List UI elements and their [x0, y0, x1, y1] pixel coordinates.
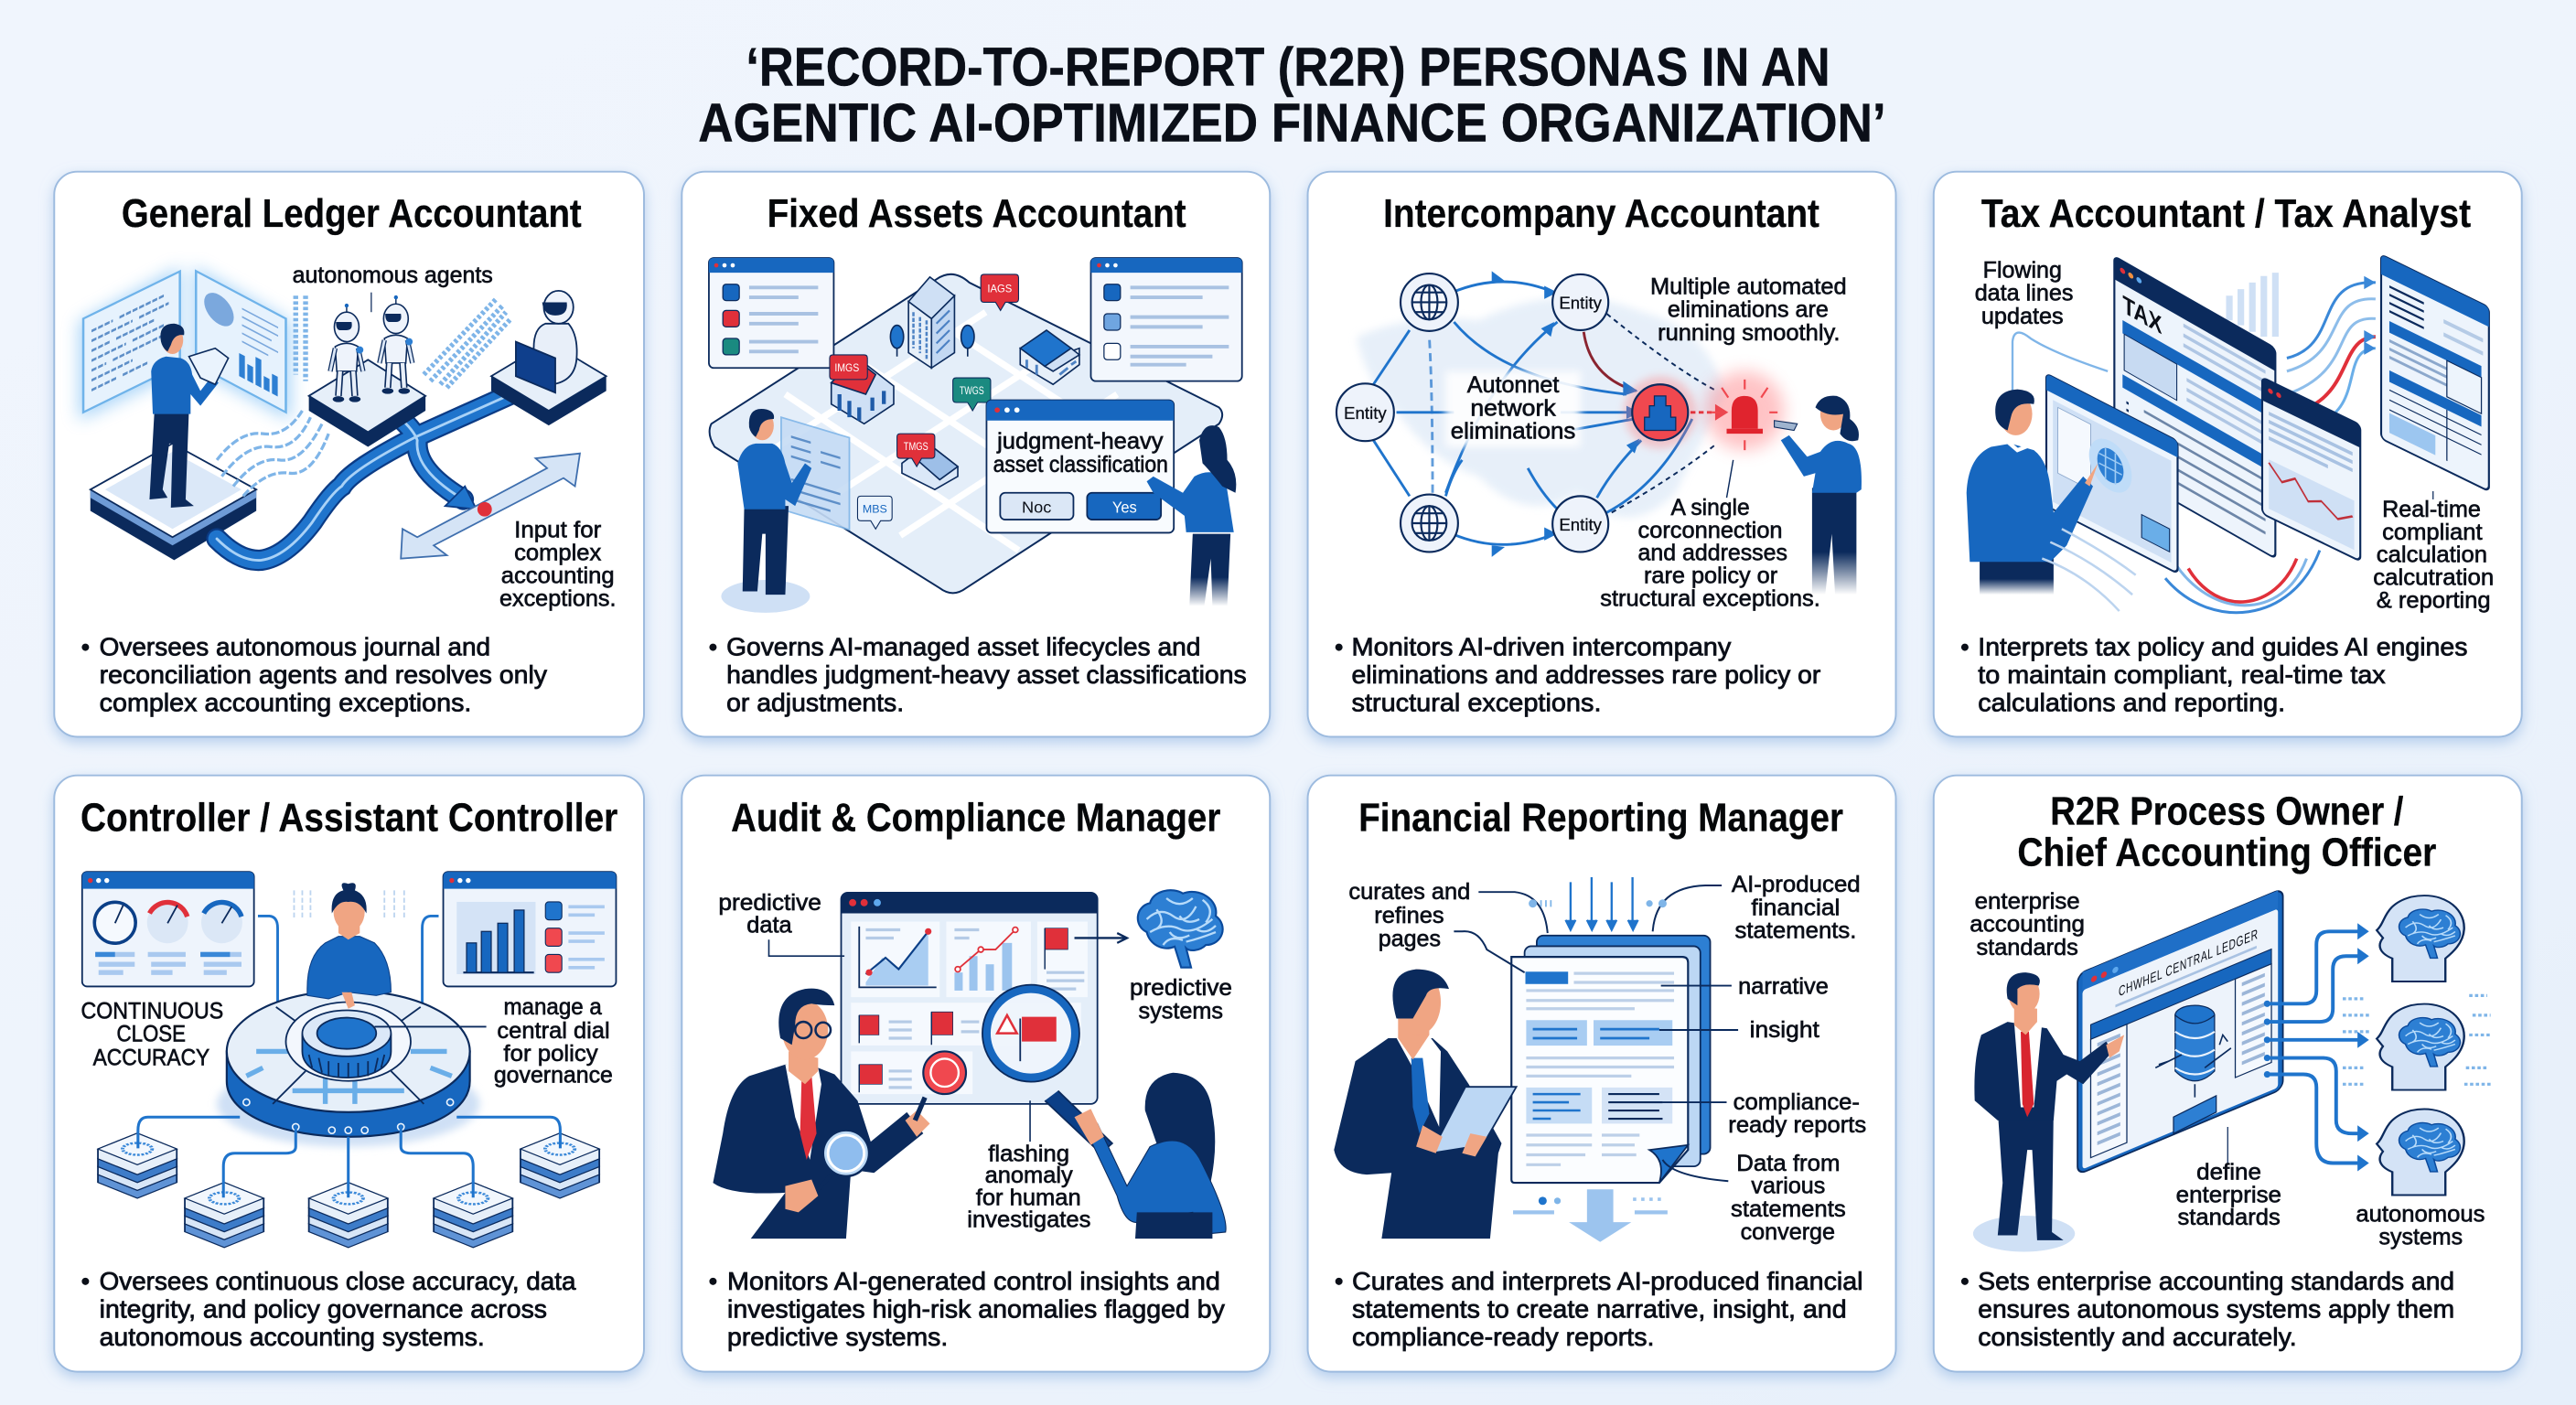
labels: [1970, 890, 2485, 1249]
flow path: [217, 394, 511, 561]
labels: structural exceptions.: [1600, 587, 1820, 612]
card background: [54, 172, 644, 736]
links to servers: [138, 1117, 560, 1197]
world map: [1357, 297, 1725, 518]
central ledger window: CHWHEL CENTRAL LEDGER: [2119, 927, 2259, 1000]
heading: [2017, 790, 2437, 874]
card background: [682, 172, 1270, 736]
labels: compliant: [2382, 520, 2483, 545]
labels: corconnection: [1638, 519, 1783, 543]
labels: Flowing: [1983, 259, 2062, 284]
data streams: [217, 295, 511, 496]
labels: Real-time: [2382, 498, 2481, 522]
labels: ready reports: [1728, 1113, 1866, 1138]
labels: Data from: [1736, 1152, 1840, 1176]
asset tags: IAGS: [987, 284, 1012, 295]
description: consistently and accurately.: [1978, 1323, 2297, 1351]
labels: predictive: [718, 891, 821, 916]
heading: General Ledger Accountant: [122, 192, 582, 236]
reporting manager: [1334, 970, 1517, 1239]
description: predictive systems.: [727, 1323, 948, 1351]
flowing lines from person: [2012, 333, 2108, 394]
description: Curates and interprets AI-produced financial: [1352, 1267, 1863, 1295]
central ledger window: [2077, 888, 2283, 1174]
heading: Intercompany Accountant: [1383, 192, 1819, 236]
decision dialog: asset classification: [993, 453, 1168, 477]
alarm: [1705, 371, 1784, 498]
heading: Financial Reporting Manager: [1358, 797, 1843, 841]
description: to maintain compliant, real-time tax: [1978, 660, 2386, 689]
description: [82, 633, 547, 717]
card background: [1934, 776, 2522, 1372]
large magnifier: [982, 985, 1112, 1153]
decision dialog: judgment-heavy: [996, 429, 1164, 454]
card background: [1934, 172, 2522, 736]
description: statements to create narrative, insight, and: [1352, 1294, 1847, 1323]
labels: pages: [1379, 927, 1441, 951]
page stack: [1511, 936, 1711, 1183]
arrows to brains: [2267, 931, 2366, 1164]
labels: eliminations are: [1668, 298, 1829, 323]
left asset window: [709, 258, 833, 368]
alert dashed links: [1606, 314, 1717, 512]
labels: compliance-: [1733, 1090, 1860, 1115]
labels: [718, 891, 1232, 1233]
description: [710, 633, 1247, 717]
asset tags: TMGS: [904, 441, 928, 453]
AI heads with brains: [2377, 896, 2464, 1195]
labels: accounting: [501, 564, 615, 589]
labels: define: [2196, 1160, 2261, 1185]
labels: accounting: [1970, 912, 2085, 937]
buildings: [832, 277, 1079, 489]
description: structural exceptions.: [1352, 689, 1601, 717]
description: ensures autonomous systems apply them: [1978, 1294, 2454, 1323]
arrow to brain: [1075, 933, 1127, 943]
output arrow: [1569, 1189, 1631, 1242]
labels: systems: [2378, 1225, 2463, 1249]
description: compliance-ready reports.: [1352, 1323, 1654, 1351]
labels: A single: [1670, 496, 1750, 520]
description: integrity, and policy governance across: [100, 1294, 547, 1323]
card background: [1308, 776, 1895, 1372]
leader line: [768, 939, 1030, 1142]
large tax window: [2114, 256, 2275, 559]
labels: calcutration: [2373, 565, 2494, 590]
woman with phone: [1775, 396, 1862, 595]
labels: Autonnet: [1467, 373, 1559, 398]
incoming arrows: [1566, 877, 1638, 929]
front window with AI brain: [2046, 373, 2177, 574]
labels: [1451, 274, 1847, 612]
asset tags: TWGS: [960, 385, 984, 397]
holographic screens: [79, 266, 291, 421]
heading: R2R Process Owner /: [2050, 790, 2403, 834]
description: [710, 1267, 1225, 1351]
panel: Tax Accountant / Tax Analyst: [1934, 172, 2522, 736]
network links: [1373, 282, 1692, 544]
labels: & reporting: [2377, 588, 2491, 613]
description: Sets enterprise accounting standards and: [1978, 1267, 2454, 1295]
globe nodes: [1401, 273, 1458, 552]
heading: Chief Accounting Officer: [2017, 831, 2437, 874]
description: eliminations and addresses rare policy or: [1352, 660, 1820, 689]
labels: updates: [1981, 305, 2064, 329]
investigator woman: [1075, 1073, 1226, 1239]
labels: investigates: [967, 1208, 1090, 1233]
label halo: [1445, 371, 1581, 446]
entity nodes: Entity: [1559, 294, 1603, 313]
description: autonomous accounting systems.: [100, 1323, 485, 1351]
card background: [682, 776, 1270, 1372]
labels: CONTINUOUS: [81, 999, 223, 1024]
third window with chart: [2262, 378, 2360, 561]
man pointing: [1967, 390, 2098, 595]
labels: manage a: [503, 995, 602, 1020]
labels: Multiple automated: [1650, 274, 1847, 299]
entity nodes: Entity: [1344, 403, 1387, 423]
labels: statements: [1731, 1197, 1846, 1222]
description: or adjustments.: [726, 689, 904, 717]
panel: Controller / Assistant Controller: [54, 776, 644, 1372]
labels: data lines: [1975, 282, 2073, 306]
description: [82, 1267, 576, 1351]
labels: enterprise: [1975, 890, 2080, 915]
labels: curates and: [1348, 880, 1470, 905]
brain icon: [1138, 890, 1223, 968]
labels: Input for: [514, 518, 601, 542]
labels: running smoothly.: [1658, 321, 1840, 346]
right tax window: [2381, 254, 2489, 491]
labels: [1348, 873, 1866, 1245]
description: [1336, 633, 1820, 717]
labels: narrative: [1738, 975, 1829, 1000]
isometric map: [710, 274, 1222, 593]
left platform: [91, 444, 256, 560]
labels: AI-produced: [1732, 873, 1861, 897]
controller woman: [307, 883, 391, 1009]
description: [1961, 633, 2467, 717]
description: investigates high-risk anomalies flagged by: [727, 1294, 1225, 1323]
description: Monitors AI-driven intercompany: [1352, 633, 1731, 661]
labels: CLOSE: [117, 1023, 186, 1047]
right asset window: [1090, 258, 1242, 381]
labels: for policy: [503, 1042, 598, 1067]
arrowheads: [1492, 271, 1639, 557]
red exception node: [1624, 376, 1728, 448]
labels: enterprise: [2176, 1183, 2281, 1207]
title: ‘RECORD-TO-REPORT (R2R) PERSONAS IN AN: [746, 36, 1830, 97]
labels: and addresses: [1638, 541, 1787, 565]
panel: Intercompany Accountant: [1308, 172, 1895, 736]
asset tags: MBS: [863, 503, 887, 515]
title: [698, 36, 1886, 153]
decision dialog: [986, 400, 1174, 532]
platforms with robots: [309, 291, 606, 446]
labels: insight: [1750, 1018, 1819, 1043]
process owner: [1973, 972, 2124, 1251]
bar chart window: [444, 872, 616, 986]
person: [149, 324, 229, 508]
description: Oversees continuous close accuracy, data: [100, 1267, 576, 1295]
central dial: [217, 991, 479, 1147]
description: Monitors AI-generated control insights and: [727, 1267, 1220, 1295]
labels: systems: [1139, 999, 1223, 1024]
labels: converge: [1741, 1220, 1835, 1245]
small data dots: [1513, 899, 1668, 1212]
large tax window: TAX: [2122, 291, 2163, 340]
labels: flashing: [988, 1142, 1069, 1166]
labels: central dial: [497, 1019, 610, 1044]
description: handles judgment-heavy asset classifications: [726, 660, 1247, 689]
description: calculations and reporting.: [1978, 689, 2285, 717]
double arrow: [401, 454, 580, 559]
entity nodes: [1336, 274, 1608, 552]
labels: autonomous agents: [293, 263, 493, 288]
labels: financial: [1751, 896, 1840, 920]
leader lines: [1454, 885, 1738, 1181]
labels: calculation: [2377, 543, 2487, 568]
connectors to dial: [258, 916, 439, 1010]
decision dialog: Noc: [1022, 498, 1051, 516]
pale bars: [2229, 273, 2275, 337]
title: AGENTIC AI-OPTIMIZED FINANCE ORGANIZATION’: [698, 91, 1886, 153]
labels: predictive: [1130, 976, 1232, 1001]
labels: refines: [1374, 904, 1444, 928]
gauges window: [82, 872, 254, 986]
labels: various: [1751, 1174, 1825, 1199]
card background: [1308, 172, 1895, 736]
labels: statements.: [1734, 918, 1856, 943]
labels: standards: [2177, 1206, 2281, 1230]
man with tablet: [721, 409, 811, 613]
description: [1961, 1267, 2454, 1351]
heading: Fixed Assets Accountant: [767, 192, 1186, 236]
labels: network: [1470, 396, 1556, 421]
labels: for human: [976, 1186, 1081, 1211]
card background: [54, 776, 644, 1372]
asset tags: IMGS: [834, 362, 859, 374]
heading: Controller / Assistant Controller: [80, 797, 617, 841]
description: complex accounting exceptions.: [100, 689, 471, 717]
description: Governs AI-managed asset lifecycles and: [726, 633, 1200, 661]
heading: Audit & Compliance Manager: [731, 797, 1221, 841]
decision dialog: Yes: [1112, 498, 1137, 516]
labels: eliminations: [1451, 420, 1575, 445]
labels: [293, 263, 616, 612]
panel: Fixed Assets Accountant: [682, 172, 1270, 736]
flowing arrows between windows: [2165, 276, 2376, 613]
labels: rare policy or: [1644, 564, 1777, 589]
labels: standards: [1976, 936, 2078, 960]
database icon: [2155, 1005, 2231, 1133]
holographic panel: [781, 417, 849, 530]
description: Interprets tax policy and guides AI engines: [1978, 633, 2467, 661]
heading: Tax Accountant / Tax Analyst: [1981, 192, 2471, 236]
description: Oversees autonomous journal and: [100, 633, 490, 661]
dashboard window: [842, 893, 1098, 1104]
labels: [1975, 259, 2494, 613]
labels: complex: [514, 541, 602, 565]
auditor man: [713, 989, 966, 1239]
panel: Financial Reporting Manager: [1308, 776, 1895, 1372]
panel: Audit & Compliance Manager: [682, 776, 1270, 1372]
labels: data: [746, 913, 792, 938]
labels: governance: [494, 1064, 613, 1089]
labels: anomaly: [985, 1164, 1073, 1188]
entity nodes: Entity: [1559, 515, 1603, 534]
asset tags: [830, 274, 1018, 529]
server stacks: [98, 1133, 599, 1248]
description: [1336, 1267, 1863, 1351]
description: reconciliation agents and resolves only: [100, 660, 547, 689]
labels: exceptions.: [499, 587, 616, 612]
panel: R2R Process Owner / Chief Accounting Officer: [1934, 776, 2522, 1372]
labels: [81, 995, 613, 1089]
labels: ACCURACY: [93, 1046, 209, 1071]
woman at dialog: [1147, 425, 1236, 606]
panel: General Ledger Accountant: [54, 172, 644, 736]
labels: autonomous: [2356, 1203, 2485, 1228]
